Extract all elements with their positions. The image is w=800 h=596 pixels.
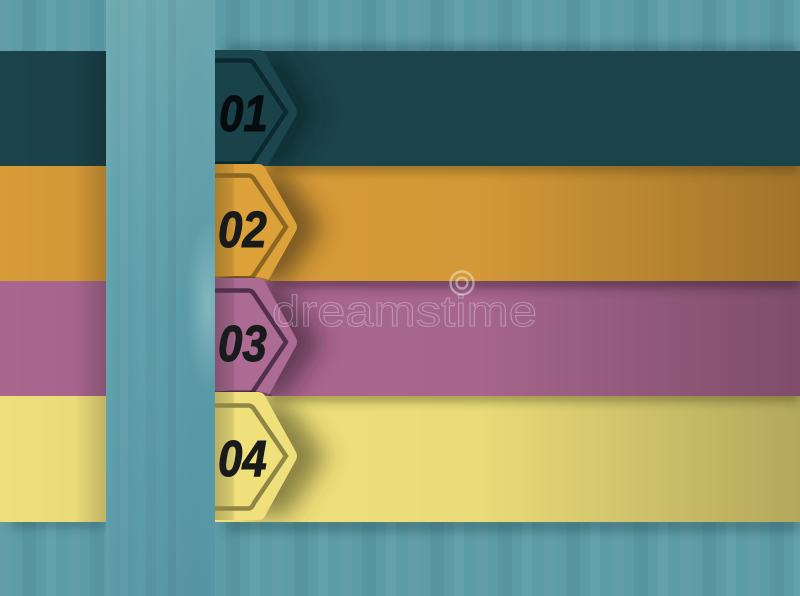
vertical strip — [106, 0, 215, 596]
ribbon 4 hexagon shadow — [250, 402, 326, 516]
ribbon 4 hexagon — [215, 392, 297, 520]
number 02: 02 — [218, 202, 267, 259]
ribbon 2 — [215, 164, 800, 281]
ribbon 3 — [215, 278, 800, 396]
number 03: 03 — [218, 316, 267, 373]
ribbon 2 hexagon shadow — [250, 172, 322, 282]
ribbon 4 — [215, 388, 800, 522]
strip highlight — [190, 238, 215, 373]
watermark spiral — [450, 272, 474, 294]
ribbon 4 top shadow — [266, 396, 800, 408]
ribbon 3 hexagon shadow — [250, 287, 322, 397]
ribbon 3 top shadow — [266, 281, 800, 293]
watermark: dreamstime — [272, 287, 537, 336]
ribbon 1 hexagon shadow — [265, 52, 318, 166]
ribbon 3 hexagon — [215, 278, 297, 396]
watermark — [272, 272, 537, 336]
ribbon 2 top shadow — [266, 166, 800, 177]
ribbon 1 — [215, 50, 800, 174]
left ribbon segments — [0, 51, 106, 522]
number 01: 01 — [219, 86, 268, 143]
number 04: 04 — [218, 431, 267, 488]
ribbon 2 hexagon — [215, 164, 297, 281]
ribbon 1 hexagon — [215, 50, 297, 174]
